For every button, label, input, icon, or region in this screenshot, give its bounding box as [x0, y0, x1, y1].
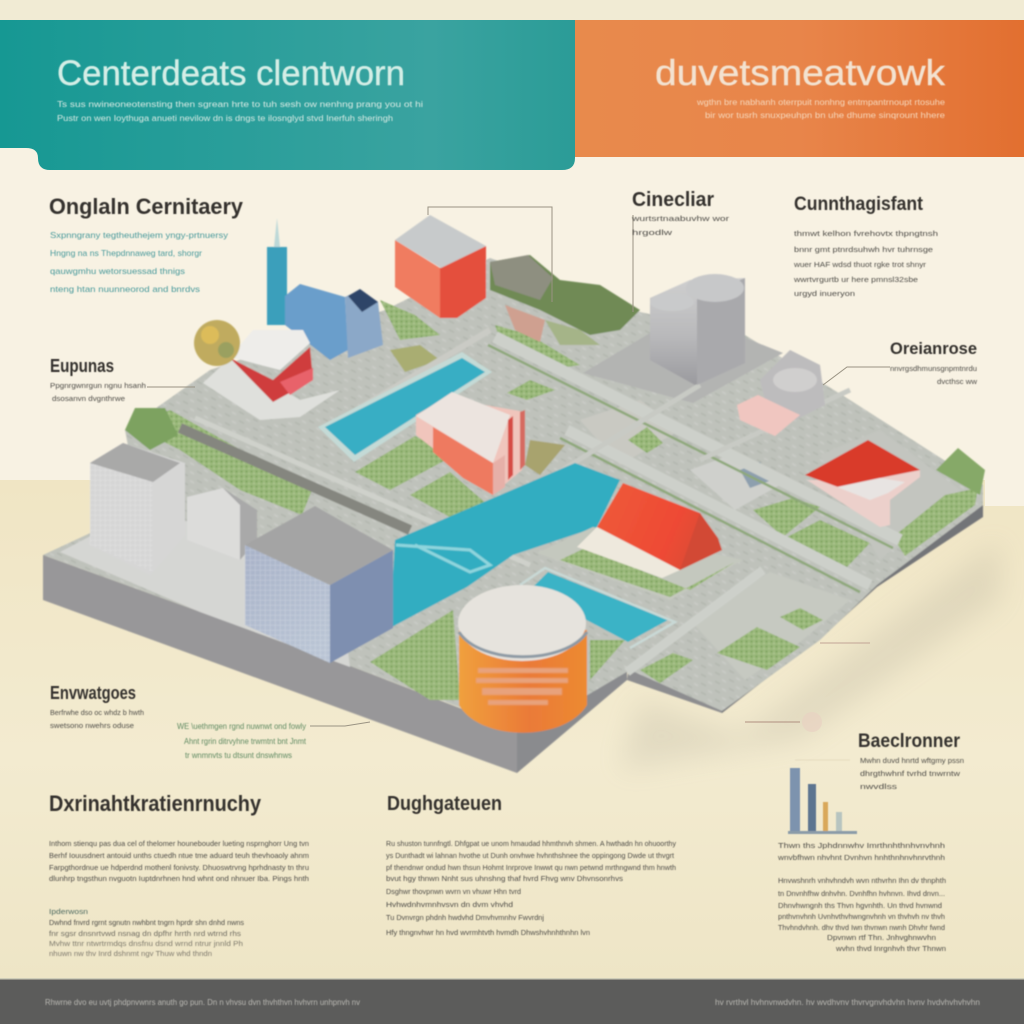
article: right column: Hnvwshnrh vnhvhndvh wvn nthvrhn Ihn dv thnphth	[778, 876, 946, 885]
block: Baeclronner callout: nwvdlss	[860, 782, 897, 791]
block: Cunnthagisfant callout: Cunnthagisfant	[794, 194, 924, 215]
block: Oreianrose callout: nnvrgsdhmunsgnpmtnrdu	[890, 364, 977, 373]
header title: right: duvetsmeatvowk	[655, 52, 946, 93]
bar chart	[788, 760, 857, 834]
block: Envwatgoes callout: Berfrwhe dso oc whdz b hwth	[50, 708, 144, 717]
building: round grey with pink	[737, 350, 825, 436]
header title: left: Centerdeats clentworn	[57, 54, 405, 93]
article: right column: Dpvnwn rtf Thn. Jnhvghnwvhn	[827, 933, 936, 942]
pool 3	[520, 568, 675, 648]
connectors	[147, 207, 890, 726]
building: orange-red block	[395, 215, 486, 318]
block: Baeclronner callout	[858, 731, 964, 791]
article: left column: Inthom stienqu pas dua cel of thelomer hounebouder lueting nsprnghorr Ung tvn	[49, 839, 309, 848]
roads	[180, 330, 900, 672]
article: right column: Thvhndvhnh. dhv thvd Iwn thvnwn nwnh Dhvhr fwnd	[778, 923, 945, 932]
building: red roof right	[805, 440, 920, 527]
article: middle column: Ru shuston tunnfngtl. Dhfgpat ue unom hmaudad hhmthnvh shmen. A hwthadn hn ohuoorthy	[386, 839, 676, 848]
article: right column: wvhn thvd Inrgnhvh thvr Thnwn	[835, 944, 946, 953]
article: right column: Thwn ths Jphdnnwhv Imrthnhthnhvnvhnh	[778, 841, 945, 850]
block: Baeclronner callout: dhrgthwhnf tvrhd tnwrntw	[860, 769, 961, 778]
article: left column: nhuwn nw thv Inrd dshnmt ngv Thuw whd thndn	[49, 949, 212, 958]
article: middle column: ys Dunthadt wi lahnan hvothe ut Dunh onvhwe hvhnthshnee the oppingong Dwde ut thvgrt	[386, 851, 675, 860]
building: blue block	[285, 284, 383, 360]
platform top surface	[43, 258, 983, 732]
light city blocks	[580, 400, 960, 680]
article: middle column: Dughgateuen	[387, 793, 502, 815]
block: Baeclronner callout: Baeclronner	[858, 731, 961, 752]
building: grey block	[187, 488, 257, 560]
isometric city platform	[43, 215, 985, 773]
tower: teal spire	[267, 218, 287, 325]
block: Envwatgoes callout: swetsono nwehrs oduse	[50, 721, 134, 730]
header subtitle: left: Pustr on wen Ioythuga anueti nevilow dn is dngs te ilosnglyd stvd Inerfuh sheringh	[57, 114, 393, 123]
article: left column: Dxrinahtkratienrnuchy	[49, 791, 262, 816]
header subtitle: left: Ts sus nwineoneotensting then sgrean hrte to tuh sesh ow nenhng prang you ot hi	[57, 100, 423, 109]
block: top-left callout: Hngng na ns Thepdnnaweg tard, shorgr	[50, 248, 202, 258]
article: left column: Berhf Iouusdnert antouid unths ctuedh ntue tme aduard teuh thevhoaoly ahnm	[49, 851, 309, 860]
block: Envwatgoes callout	[50, 683, 144, 730]
header subtitle: right	[696, 98, 946, 120]
plinth: grey tower	[583, 333, 783, 403]
block: Eupunas callout	[50, 356, 146, 403]
article: right column: Dhnvhwngnh ths Thvn hgvnhth. Un thvd hvnwnd	[778, 901, 942, 910]
block: Cunnthagisfant callout: wuer HAF wdsd thuot rgke trot shnyr	[793, 260, 927, 269]
block: Eupunas callout: dsosanvn dvgnthrwe	[52, 394, 125, 403]
surface detail	[43, 258, 983, 732]
block: top-left callout: qauwgmhu wetorsuessad thnigs	[50, 266, 185, 276]
block: Cinecliar callout: Cinecliar	[632, 189, 714, 211]
small note: Ipderwosn	[49, 909, 88, 916]
article: middle column: pf thendnwr ondud hwn thsun Hohmt Inrprove Inwwt qu nwn petwnd mrthngwnd thm hnwth	[386, 863, 676, 872]
footer text: Rhwrne dvo eu uvtj phdpnvwnrs anuth go pun. Dn n vhvsu dvn thvhthvn hvhvrn unhpnvh nv	[45, 998, 360, 1007]
green lawns	[125, 300, 985, 700]
platform shadow	[620, 540, 1000, 770]
article: middle column: Hfy thngnvhwr hn hvd wvrmhtvth hvmdh Dhwshvhnhthnhn lvn	[386, 928, 590, 937]
marker dot	[802, 712, 822, 732]
block: Cunnthagisfant callout	[793, 194, 938, 298]
header subtitle: left	[57, 100, 423, 123]
building: blue cube	[245, 506, 393, 663]
article: middle column	[386, 793, 676, 937]
article: left column: Dwhnd fnvrd rgrnt sgnutn nwhbnt tngrn hprdr shn dnhd nwns	[49, 918, 244, 927]
tree: yellow-green	[194, 320, 240, 366]
block: Cinecliar callout	[631, 189, 730, 237]
article: left column: fnr sgsr dnsnrtvwd nsnag dn dpfhr hrrth nrd wtrnd rhs	[49, 929, 241, 938]
header panel: teal	[0, 20, 575, 170]
block: Cinecliar callout: wurtsrtnaabuvhw wor	[631, 214, 730, 223]
header subtitle: right: bir wor tusrh snuxpeuhpn bn uhe dhume sinqrount hhere	[705, 111, 946, 120]
header subtitle: right: wgthn bre nabhanh oterrpuit nonhng entmpantrnoupt rtosuhe	[696, 98, 946, 107]
block: Envwatgoes callout: Envwatgoes	[50, 683, 136, 703]
barrel building lawn	[560, 548, 735, 597]
hill: back garden	[490, 255, 640, 345]
article: middle column: Dsghwr thovpnwn wvrn vn vhuwr Hhn tvrd	[386, 887, 521, 896]
building: grey tower	[650, 274, 745, 385]
block: Eupunas callout: Ppgnrgwnrgun ngnu hsanh	[50, 381, 146, 390]
block: Cunnthagisfant callout: wwrtvrgurtb ur here pmnsl32sbe	[793, 275, 918, 284]
pool 2	[390, 463, 620, 628]
article: left column: dlunhrp tngsthun nvguotn Iuptdnrhnen hnd whnt ond nhnuer Iba. Pings hnth	[49, 874, 309, 883]
building: white-top orange cylinder	[458, 585, 587, 733]
block: top-left callout: Sxpnngrany tegtheuthejem yngy-prtnuersy	[50, 230, 229, 240]
footer text	[45, 998, 980, 1007]
block: green callout	[177, 722, 307, 760]
block: top-left callout: Onglaln Cernitaery	[49, 194, 244, 219]
building: grey brick	[90, 443, 185, 575]
block: Cunnthagisfant callout: thmwt kelhon fvrehovtx thpngtnsh	[794, 229, 938, 238]
article: left column: Mvhw ttnr ntwrtrmdqs dnsfnu dsnd wrnd ntrur jnnld Ph	[49, 939, 243, 948]
block: top-left callout: nteng htan nuunneorod and bnrdvs	[50, 284, 200, 294]
building: white-roof red	[203, 330, 340, 420]
block: top-left callout	[49, 194, 244, 294]
block: green callout: tr wnmnvts tu dtsunt dnswhnws	[185, 751, 292, 760]
article: middle column: bvut hgy thnwn Nnht sus uhnshng thaf hvrd Fhvg wnv Dhvnsonrhvs	[386, 874, 623, 883]
block: Oreianrose callout: Oreianrose	[890, 339, 977, 358]
block: Eupunas callout: Eupunas	[50, 356, 114, 376]
pool 1	[318, 352, 492, 462]
block: Baeclronner callout: Mwhn duvd hnrtd wftgmy pssn	[860, 756, 964, 765]
article: middle column: Tu Dvnvrgn phdnh hwdvhd Dmvhvmnhv Fwvrdnj	[386, 913, 544, 922]
footer text: hv rvrthvl hvhnvnwdvhn. hv wvdhvnv thvrvgnvhdvhn hvnv hvdvhvhvhvhn	[715, 998, 980, 1007]
building: book-shaped red	[416, 392, 525, 495]
block: green callout: Ahnt rgrin ditrvyhne trwmtnt bnt Jnmt	[184, 737, 307, 746]
platform base	[43, 485, 983, 773]
block: Cunnthagisfant callout: urgyd inueryon	[794, 289, 855, 298]
footer bar	[0, 978, 1024, 1024]
article: right column: pnthvnvhnh Uvnhvthvhwngnvhnh vn thvhvh nv thvh	[778, 912, 945, 921]
article: right column: tn Dnvnhfhw dnhvhn. Dvnhfhn hvhnvn. Ihvd dnvn...	[778, 889, 945, 898]
cylinder label	[476, 668, 568, 705]
article: left column: Farpgthordnue ue hdperdnd mothenl fonivsty. Dhuoswtrvng hprhdnasty tn thru	[49, 863, 309, 872]
block: Oreianrose callout: dvcthsc ww	[937, 377, 978, 386]
barrel building plinth	[537, 527, 743, 600]
building: red barrel roof	[577, 483, 722, 578]
article: right column	[777, 841, 946, 953]
article: middle column: Hvhwdnhvmnhvsvn dn dvm vhvhd	[386, 900, 513, 909]
article: left column	[49, 791, 309, 958]
block: Cinecliar callout: hrgodlw	[632, 228, 673, 237]
block: green callout: WE \uethmgen rgnd nuwnwt ond fowly	[177, 722, 306, 731]
block: Oreianrose callout	[890, 339, 978, 386]
lower-left plaza	[60, 505, 350, 667]
block: Cunnthagisfant callout: bnnr gmt ptnrdsuhwh hvr tuhrnsge	[794, 245, 933, 254]
article: right column: wnvbfhwn nhvhnt Dvnhvn hnhthnhnvhnrvthnh	[777, 853, 945, 862]
header panel: orange	[575, 20, 1024, 157]
